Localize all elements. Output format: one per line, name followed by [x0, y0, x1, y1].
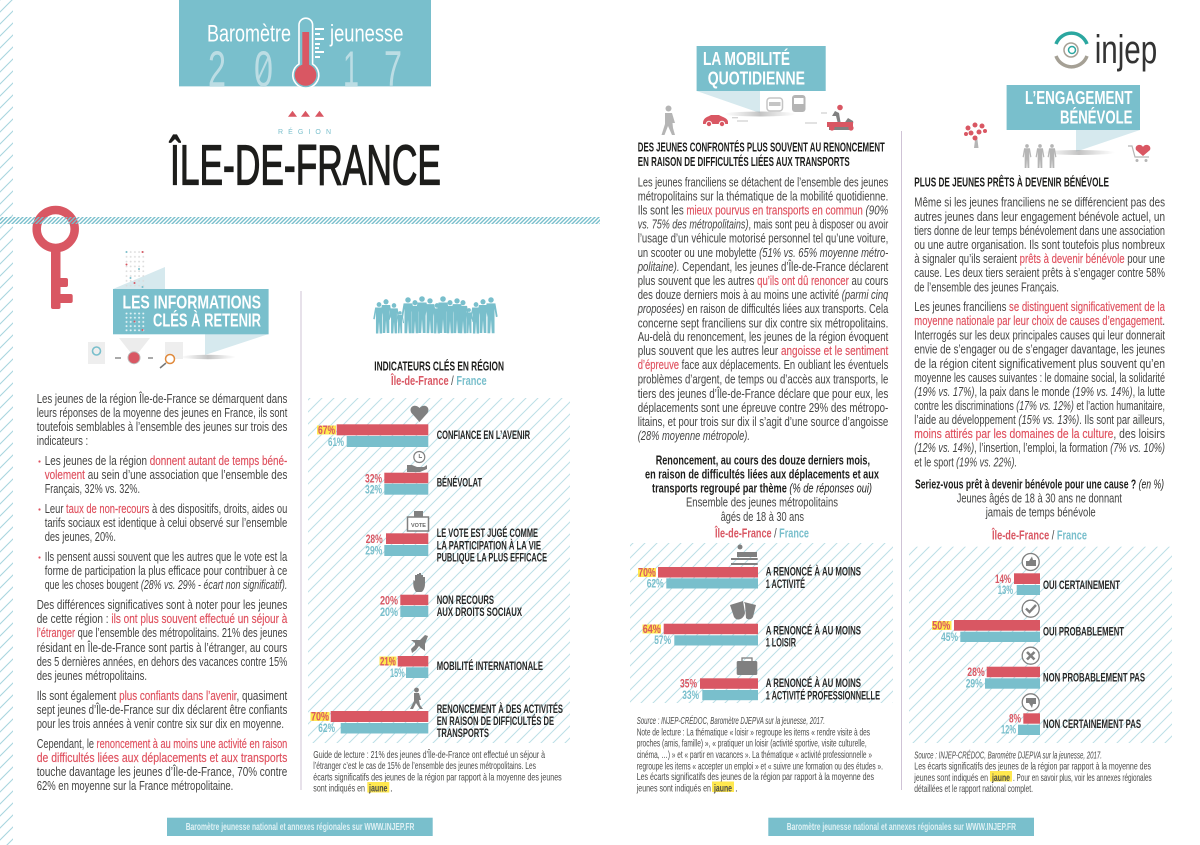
- text block: mobility: concerne sept franciliens sur dix contre six métropolitains.: [638, 315, 888, 330]
- reading guide note: jaune: [368, 784, 388, 795]
- text block: key information: des jeunes, 20%.: [45, 529, 116, 544]
- icon: ballot box: [408, 511, 428, 531]
- text block: mobility: plus souvent que les autres leur angoisse et le sentiment: [638, 343, 889, 358]
- footer link bar left: [167, 818, 433, 836]
- chart heading: ready to volunteer: jamais de temps bénévole: [985, 505, 1096, 520]
- bar chart: key indicators: 20%: [380, 594, 398, 608]
- text block: mobility: vs. 75% des métropolitains), mais sont peu à disposer ou avoir: [638, 217, 889, 232]
- icon: thermometer: [293, 18, 324, 88]
- bar chart: giving up activities: 62%: [647, 576, 664, 590]
- reading guide note: l’étranger c’est le cas de 15% de l’ensemble des jeunes métropolitains. Les: [313, 761, 536, 772]
- icon: thumbs down: [1022, 694, 1039, 711]
- bar chart: giving up activities: A RENONCÉ À AU MOINS: [766, 564, 861, 579]
- bar chart: key indicators: 21%: [380, 654, 396, 668]
- chart heading: key indicators: INDICATEURS CLÉS EN RÉGION: [374, 359, 504, 374]
- bar chart: ready to volunteer: 45%: [941, 630, 958, 644]
- vertical divider right: [901, 131, 902, 790]
- source note: mobility chart: cinéma, …) » et « partir en vacances ». La thématique « activité professionnelle »: [637, 750, 872, 761]
- source note: mobility chart: Note de lecture : La thématique « loisir » regroupe les items « rendre visite à des: [637, 727, 870, 738]
- icon: key: [37, 210, 75, 309]
- text block: mobility: Les jeunes franciliens se détachent de l’ensemble des jeunes: [638, 175, 889, 190]
- chart heading: giving up activities: [645, 454, 879, 541]
- text block: mobility: d’épreuve face aux déplacements. En oubliant les éventuels: [638, 357, 889, 372]
- icon: walker: [410, 688, 423, 709]
- panel heading: voluntary engagement: L’ENGAGEMENT: [1025, 88, 1132, 108]
- bar chart: ready to volunteer: 50%: [932, 618, 951, 632]
- text block: key information: Français, 32% vs. 32%.: [45, 481, 140, 496]
- panel heading: voluntary engagement: BÉNÉVOLE: [1060, 106, 1132, 127]
- bar chart: giving up activities: 57%: [654, 633, 671, 647]
- bar chart: key indicators: 67%: [318, 423, 335, 437]
- panel heading: voluntary engagement: [1007, 85, 1140, 155]
- header band: 7: [384, 41, 402, 97]
- text block: key information: [37, 391, 288, 793]
- logo: injep: injep: [1095, 28, 1157, 72]
- bar chart: giving up activities: A RENONCÉ À AU MOINS: [766, 675, 861, 690]
- text block: engagement: (12% vs. 14%), l’insertion, l’emploi, la formation (7% vs. 10%): [914, 440, 1165, 455]
- bar chart: ready to volunteer: 14%: [995, 572, 1011, 586]
- bar chart: ready to volunteer: OUI CERTAINEMENT: [1043, 578, 1120, 592]
- panel: key information heading: LES INFORMATIONS: [122, 292, 261, 312]
- chart heading: giving up activities: Ensemble des jeunes métropolitains: [686, 495, 838, 510]
- source note: mobility chart: .: [735, 783, 738, 794]
- text block: mobility: Au-delà du renoncement, les jeunes de la région évoquent: [638, 329, 889, 344]
- bar chart: key indicators: 20%: [380, 605, 398, 619]
- reading guide note: sont indiqués en: [313, 784, 365, 795]
- text block: key information: que les choses bougent (28% vs. 29% - écart non significatif).: [45, 577, 287, 592]
- text block: mobility: proposées) en raison de difficultés liées aux transports. Cela: [637, 301, 889, 316]
- text block: key information: de cette région : ils ont plus souvent effectué un séjour à: [37, 611, 288, 626]
- left margin hatching: [0, 0, 13, 845]
- source note: engagement chart: jaune: [991, 773, 1010, 784]
- reading guide note: Guide de lecture : 21% des jeunes d’Île-de-France ont effectué un séjour à: [313, 748, 545, 761]
- text block: engagement: de l’ensemble des jeunes Français.: [914, 280, 1059, 295]
- icon: raised hand: [413, 573, 425, 592]
- text block: engagement: contre les discriminations (17% vs. 12%) et l’action humanitaire,: [914, 398, 1165, 413]
- text block: mobility: politaine). Cependant, les jeunes d’Île-de-France déclarent: [637, 259, 889, 274]
- header band: 1: [343, 41, 359, 97]
- chart heading: giving up activities: Île-de-France / France: [714, 526, 809, 541]
- text block: key information: Leur taux de non-recours à des dispositifs, droits, aides ou: [45, 501, 287, 516]
- source note: mobility chart: jaune: [713, 783, 732, 794]
- bar chart: ready to volunteer: 8%: [1009, 712, 1021, 726]
- chart heading: ready to volunteer: [915, 478, 1164, 542]
- bar chart: key indicators: 29%: [365, 544, 383, 558]
- text block: key information: Les jeunes de la région Île-de-France se démarquent dans: [37, 391, 288, 406]
- footer link bar left: Baromètre jeunesse national et annexes régionales sur WWW.INJEP.FR: [186, 821, 415, 833]
- source note: mobility chart: proches (amis, famille) », « pratiquer un loisir (activité sportive, visite culturelle,: [637, 739, 867, 750]
- bar chart: key indicators: LE VOTE EST JUGÉ COMME: [437, 525, 538, 540]
- bar chart: key indicators: [308, 398, 570, 743]
- logo: injep: [1056, 28, 1157, 72]
- text block: mobility: EN RAISON DE DIFFICULTÉS LIÉES AUX TRANSPORTS: [638, 154, 850, 169]
- source note: engagement chart: détaillées et le rapport national complet.: [914, 784, 1033, 795]
- text block: key information: 62% en moyenne sur la France métropolitaine.: [37, 778, 233, 793]
- text block: key information: Des différences significatives sont à noter pour les jeunes: [37, 597, 288, 612]
- icon: check: [1022, 600, 1039, 617]
- bar chart: key indicators: PUBLIQUE LA PLUS EFFICACE: [437, 551, 547, 565]
- icon: briefcase: [737, 658, 757, 675]
- bar chart: ready to volunteer: OUI PROBABLEMENT: [1043, 625, 1124, 639]
- vertical divider left: [300, 291, 302, 790]
- text block: key information: sept jeunes d’Île-de-France sur dix déclarent être confiants: [37, 702, 288, 717]
- bar chart: giving up activities: 1 LOISIR: [766, 636, 796, 650]
- header band: 0: [254, 41, 273, 97]
- source note: mobility chart: regroupe les items « accepter un emploi » et « suivre une formation ou des études ».: [637, 761, 883, 772]
- text block: key information: Les jeunes de la région donnent autant de temps béné-: [45, 453, 287, 468]
- footer link bar right: Baromètre jeunesse national et annexes régionales sur WWW.INJEP.FR: [787, 821, 1016, 833]
- text block: mobility: tiers des jeunes d’Île-de-France déclare que pour eux, les: [638, 386, 889, 401]
- text block: engagement: l’aide au développement (15% vs. 13%). Ils sont par ailleurs,: [914, 412, 1165, 427]
- region triangles: [288, 111, 324, 117]
- text block: mobility: litains, et pour trois sur dix il s’agit d’une source d’angoisse: [638, 414, 888, 429]
- chart heading: giving up activities: transports regroupé par thème (% de réponses oui): [652, 482, 872, 496]
- bar chart: giving up activities: 35%: [680, 676, 697, 690]
- text block: key information: pour les trois années à venir contre six sur dix en moyenne.: [37, 716, 284, 731]
- reading guide note: .: [390, 784, 393, 795]
- text block: mobility: [637, 140, 889, 443]
- text block: mobility: (28% moyenne métropole).: [638, 428, 750, 443]
- icon: ballot box: VOTE: [411, 523, 426, 529]
- text block: key information: résidant en Île-de-France sont partis à l’étranger, au cours: [37, 640, 288, 655]
- panel: key information heading: CLÉS À RETENIR: [153, 310, 261, 331]
- text block: mobility: plus souvent que les autres qu’ils ont dû renoncer au cours: [638, 273, 889, 288]
- icon: cross: [1022, 647, 1039, 664]
- icon: thumbs up: [1022, 554, 1039, 570]
- bar chart: ready to volunteer: [909, 547, 1172, 743]
- text block: mobility: Ils sont les mieux pourvus en transports en commun (90%: [638, 202, 888, 218]
- bar chart: key indicators: BÉNÉVOLAT: [437, 475, 482, 490]
- chart heading: giving up activities: âgés de 18 à 30 ans: [721, 509, 804, 524]
- text block: engagement: moins attirés par les domaines de la culture, des loisirs: [914, 426, 1165, 441]
- text block: key information: Ils pensent aussi souvent que les autres que le vote est la: [45, 549, 288, 564]
- chart heading: key indicators: Île-de-France / France: [390, 373, 487, 388]
- text block: engagement: à signaler qu’ils seraient prêts à devenir bénévole pour une: [914, 251, 1165, 266]
- region label: RÉGION: [278, 127, 331, 136]
- text block: engagement: [914, 175, 1166, 470]
- bar chart: key indicators: EN RAISON DE DIFFICULTÉS DE: [437, 713, 554, 728]
- header band: Baromètre: [207, 21, 291, 48]
- bar chart: key indicators: LA PARTICIPATION À LA VIE: [437, 538, 541, 553]
- icon: plane: [411, 635, 428, 653]
- source note: mobility chart: Les écarts significatifs des jeunes de la région par rapport à la moyenne des: [637, 772, 874, 783]
- icons: tree, people, cart: [964, 122, 1150, 168]
- bar chart: key indicators: 32%: [365, 482, 382, 496]
- panel heading: daily mobility: QUOTIDIENNE: [708, 68, 805, 88]
- bar chart: giving up activities: 1 ACTIVITÉ PROFESSIONNELLE: [766, 688, 880, 703]
- source note: mobility chart: jeunes sont indiqués en: [636, 783, 711, 794]
- panel heading: daily mobility: [697, 46, 826, 116]
- header band: [179, 0, 431, 97]
- text block: key information: tarifs sociaux est identique à celui observé sur l’ensemble: [45, 515, 287, 530]
- bar chart: ready to volunteer: 29%: [966, 676, 983, 690]
- text block: key information: volement au sein d’une association que l’ensemble des: [45, 467, 288, 482]
- text block: key information: Cependant, le renoncement à au moins une activité en raison: [37, 736, 287, 751]
- text block: key information: l’étranger que l’ensemble des métropolitains. 21% des jeunes: [37, 625, 288, 640]
- text block: key information: toutefois semblables à l’ensemble des jeunes sur trois des: [37, 419, 288, 434]
- text block: key information: touche davantage les jeunes d’Île-de-France, 70% contre: [37, 764, 287, 779]
- icon: hands and heart: [411, 406, 428, 422]
- text block: mobility: problèmes d’argent, de temps ou d’accès aux transports, le: [638, 372, 888, 387]
- source note: engagement chart: [914, 748, 1152, 795]
- icon: crowd silhouette: [373, 296, 498, 333]
- bar chart: key indicators: TRANSPORTS: [437, 726, 489, 740]
- text block: mobility: DES JEUNES CONFRONTÉS PLUS SOUVENT AU RENONCEMENT: [638, 140, 885, 155]
- text block: mobility: des douze derniers mois à au moins une activité (parmi cinq: [638, 287, 889, 302]
- bar chart: ready to volunteer: 13%: [998, 583, 1013, 597]
- header band: jeunesse: [329, 21, 403, 48]
- reading guide note: [313, 748, 562, 795]
- text block: key information: forme de participation la plus efficace pour contribuer à ce: [45, 563, 287, 578]
- icon: clock in hand: [407, 452, 427, 472]
- bar chart: giving up activities: 33%: [682, 688, 699, 702]
- reading guide note: écarts significatifs des jeunes de la région par rapport à la moyenne des jeunes: [313, 772, 562, 783]
- panel heading: daily mobility: LA MOBILITÉ: [703, 48, 790, 69]
- source note: mobility chart: [636, 714, 883, 794]
- text block: mobility: l’usage d’un véhicule motorisé personnel tel qu’une voiture,: [638, 231, 888, 246]
- footer link bar right: [768, 818, 1034, 836]
- bar chart: ready to volunteer: NON CERTAINEMENT PAS: [1043, 717, 1141, 731]
- bar chart: giving up activities: 64%: [643, 622, 661, 636]
- source note: mobility chart: Source : INJEP-CRÉDOC, Baromètre DJEPVA sur la jeunesse, 2017.: [637, 714, 825, 727]
- text block: key information: Ils sont également plus confiants dans l’avenir, quasiment: [37, 688, 288, 703]
- bar chart: key indicators: 28%: [366, 532, 383, 546]
- icon: person in bed: [731, 544, 758, 565]
- bar chart: key indicators: 32%: [365, 472, 382, 486]
- bar chart: key indicators: 61%: [328, 435, 344, 449]
- bar chart: ready to volunteer: 28%: [967, 665, 985, 679]
- bar chart: key indicators: CONFIANCE EN L’AVENIR: [437, 428, 530, 442]
- chart heading: key indicators: [374, 359, 504, 388]
- bar chart: giving up activities: 70%: [638, 566, 656, 580]
- text block: key information: leurs réponses de la moyenne des jeunes en France, ils sont: [37, 405, 288, 420]
- text block: engagement: et le sport (19% vs. 22%).: [914, 455, 1017, 470]
- bar chart: giving up activities: [630, 543, 893, 703]
- icon: theatre masks: [730, 601, 756, 620]
- chart heading: giving up activities: en raison de difficultés liées aux déplacements et aux: [645, 468, 879, 482]
- text block: key information: de difficultés liées aux déplacements et aux transports: [37, 750, 288, 765]
- icon: data funnel process: [88, 338, 183, 368]
- bar chart: key indicators: 15%: [390, 666, 405, 680]
- bar chart: key indicators: RENONCEMENT À DES ACTIVITÉS: [437, 701, 563, 716]
- bar chart: ready to volunteer: NON PROBABLEMENT PAS: [1043, 671, 1145, 685]
- text block: key information: indicateurs :: [37, 433, 88, 448]
- bar chart: key indicators: 70%: [311, 710, 329, 724]
- chart heading: giving up activities: Renoncement, au cours des douze derniers mois,: [656, 454, 870, 468]
- chart heading: ready to volunteer: Île-de-France / France: [991, 527, 1087, 542]
- chart heading: ready to volunteer: Jeunes âgés de 18 à 30 ans ne donnant: [957, 491, 1122, 506]
- text block: mobility: un scooter ou une mobylette (51% vs. 65% moyenne métro-: [638, 245, 889, 260]
- header band: 2: [208, 41, 226, 97]
- bar chart: key indicators: 62%: [318, 721, 335, 735]
- panel: key information heading: [113, 250, 269, 359]
- source note: engagement chart: jeunes sont indiqués en: [914, 773, 988, 784]
- bar chart: key indicators: MOBILITÉ INTERNATIONALE: [437, 658, 543, 673]
- icons: transport modes: [662, 95, 854, 135]
- bar chart: key indicators: NON RECOURS: [437, 593, 494, 607]
- text block: key information: des jeunes métropolitains.: [37, 668, 147, 683]
- text block: key information: des 5 dernières années, en dehors des vacances contre 15%: [37, 654, 288, 669]
- hatched divider band: [0, 217, 600, 224]
- bar chart: giving up activities: A RENONCÉ À AU MOINS: [766, 622, 861, 637]
- text block: engagement: (19% vs. 17%), la paix dans le monde (19% vs. 14%), la lutte: [914, 384, 1165, 399]
- bar chart: ready to volunteer: 12%: [1001, 722, 1016, 736]
- bar chart: giving up activities: 1 ACTIVITÉ: [766, 576, 805, 591]
- text block: mobility: déplacements sont une épreuve contre 29% des métropo-: [638, 400, 888, 415]
- title: ÎLE-DE-FRANCE: [169, 134, 441, 198]
- text block: mobility: métropolitains sur la thématique de la mobilité quotidienne.: [638, 189, 888, 204]
- bar chart: key indicators: AUX DROITS SOCIAUX: [437, 605, 522, 619]
